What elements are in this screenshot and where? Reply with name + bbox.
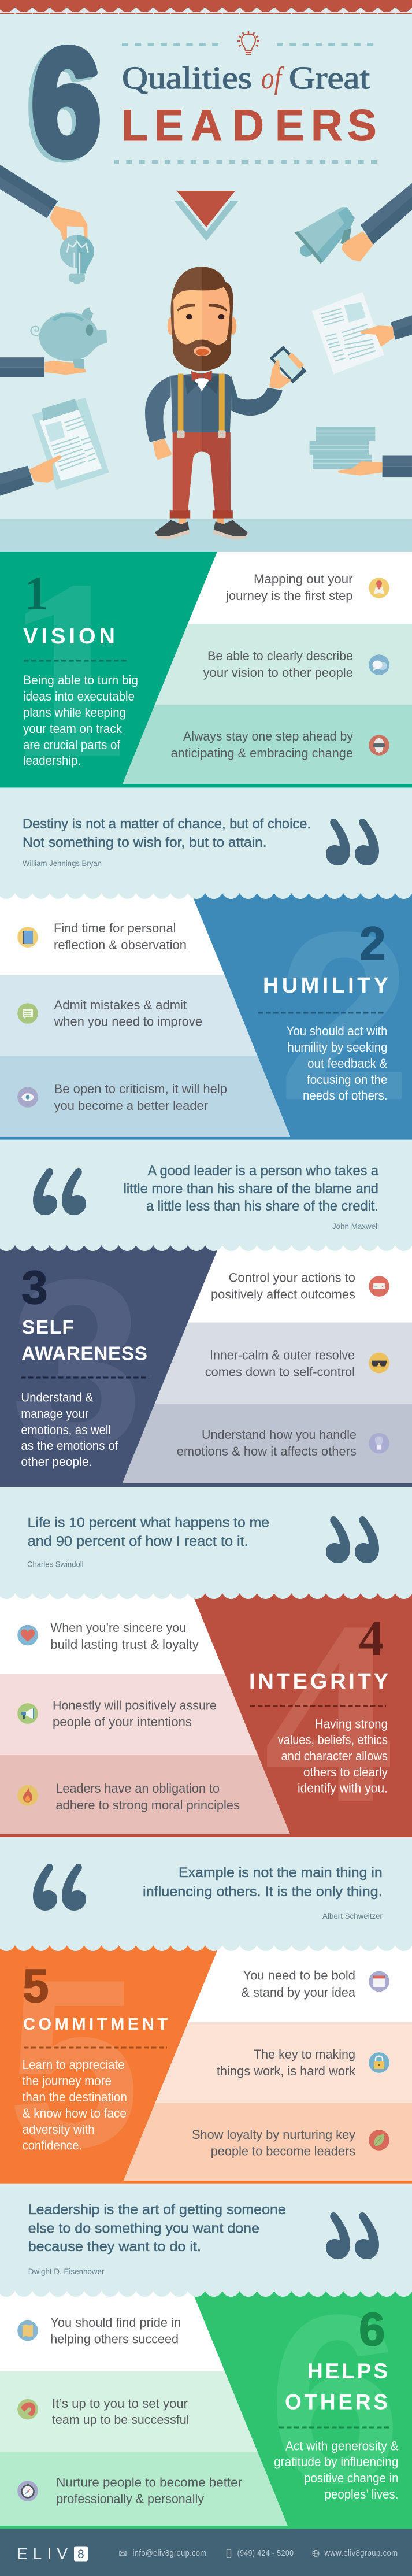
point text 1 (54, 921, 187, 952)
point text 2 (54, 998, 202, 1029)
description: and character allows (281, 1749, 388, 1763)
quote: leadership is the art: Leadership is the art of getting someone (28, 2202, 286, 2218)
description: ideas into executable (23, 689, 135, 704)
icon: closing quote mark (326, 819, 379, 865)
number 3: 3 (21, 1261, 48, 1314)
point text 2: people of your intentions (53, 1715, 192, 1729)
icon: light bulb (237, 31, 259, 54)
point text 2: when you need to improve (54, 1014, 202, 1029)
description: positive change in (304, 2471, 399, 2485)
quote: good leader: John Maxwell (332, 1222, 379, 1231)
big number 6 shadow: 6 (27, 21, 97, 190)
icon: megaphone (17, 1703, 38, 1724)
heading: humility: HUMILITY (263, 974, 388, 998)
description: the journey more (23, 2074, 112, 2088)
point text 2: things work, is hard work (217, 2064, 356, 2078)
point text 1: Control your actions to (229, 1271, 355, 1285)
point text 3 (56, 2475, 242, 2506)
number 4: 4 (359, 1610, 384, 1666)
shoes and ankles (179, 517, 186, 526)
scallop edge (0, 1593, 412, 1600)
point text 1 (50, 1620, 199, 1652)
point text 3: anticipating & embracing change (171, 746, 353, 760)
point text 2: team up to be successful (52, 2412, 189, 2427)
contact: email: info@eliv8group.com (133, 2549, 206, 2558)
point text 3: adhere to strong moral principles (55, 1798, 240, 1812)
point text 1: Mapping out your (254, 572, 353, 586)
scallop edge (0, 1945, 412, 1952)
quote: example (33, 1864, 383, 1920)
heading: Qualities of Great: Qualities (122, 60, 252, 95)
icon: stack with hand (310, 427, 412, 477)
heading: self awareness (21, 1317, 147, 1365)
point text 2 (203, 649, 353, 680)
point text 1: positively affect outcomes (211, 1287, 355, 1302)
icon: map pin (369, 578, 389, 598)
contact: phone: (949) 424 - 5200 (237, 2549, 294, 2558)
description: & know how to face (23, 2106, 127, 2120)
point text 3 (177, 1427, 357, 1459)
description: your team on track (23, 721, 123, 736)
quote: life is 10 percent: Life is 10 percent what happens to me (28, 1515, 269, 1531)
quote: good leader: a little less than his share of the credit. (146, 1198, 378, 1214)
description (274, 2439, 399, 2501)
heading: helps others (285, 2359, 388, 2414)
quote: destiny (23, 816, 379, 868)
number 6: 6 (359, 2303, 385, 2356)
header scallop band (0, 0, 412, 14)
icon: flame (17, 1785, 38, 1806)
icon: eye (17, 1087, 38, 1108)
heading: Qualities of Great: Great (289, 60, 370, 95)
description: Being able to turn big (23, 673, 138, 687)
hands and phone (153, 438, 172, 460)
description: gratitude by influencing (274, 2455, 399, 2469)
row: mapping (188, 552, 412, 624)
panel: vision (0, 527, 412, 812)
quote: leadership is the art: because they want to do it. (28, 2239, 201, 2255)
point text 1 (50, 2315, 181, 2346)
footer (0, 2529, 412, 2576)
downward triangle (174, 191, 239, 241)
quote: destiny: Destiny is not a matter of chance, but of choice. (23, 816, 311, 832)
point text 2: comes down to self-control (205, 1364, 355, 1379)
icon: map (17, 2320, 38, 2341)
icon: piggy bank with hand (0, 308, 107, 377)
description (23, 673, 138, 768)
heading: Qualities of Great (122, 60, 370, 95)
quote: leadership is the art (28, 2202, 379, 2276)
logo: ELIV (17, 2545, 68, 2563)
number 2: 2 (359, 917, 386, 970)
point text 1: You need to be bold (243, 1968, 355, 1982)
description: humility by seeking (288, 1040, 387, 1054)
description: Act with generosity & (285, 2439, 399, 2453)
contact: website: www.eliv8group.com (324, 2549, 398, 2558)
ghost number 3: 3 (10, 1229, 144, 1497)
heading: Qualities of Great: of (261, 61, 285, 95)
head (168, 317, 174, 335)
point text 3: Always stay one step ahead by (183, 729, 354, 743)
point text 1 (211, 1271, 355, 1302)
icon: magnet (17, 2399, 38, 2420)
panel: commitment (0, 1929, 412, 2197)
ghost number 6: 6 (268, 2264, 402, 2533)
heading: integrity: INTEGRITY (249, 1670, 388, 1694)
description: focusing on the (307, 1072, 387, 1087)
description (278, 1717, 388, 1796)
point text 2 (53, 1698, 217, 1729)
description: adversity with (23, 2122, 95, 2137)
point text 3: you become a better leader (54, 1098, 208, 1113)
description (21, 1390, 118, 1469)
description: are crucial parts of (23, 738, 121, 752)
description: emotions, as well (21, 1423, 111, 1437)
icon: closing quote mark (326, 2212, 379, 2259)
description (287, 1024, 388, 1103)
scallop edge (0, 893, 412, 900)
icon: leaf (369, 2130, 389, 2151)
description: Having strong (315, 1717, 388, 1731)
point text 2 (217, 2047, 356, 2078)
heading: helps others: HELPS (307, 2359, 388, 2383)
quote: example: influencing others. It is the only thing. (143, 1884, 383, 1900)
icon: closing quote mark (326, 1516, 379, 1563)
logo: 8 (77, 2548, 84, 2561)
point text 3: Be open to criticism, it will help (54, 1082, 227, 1096)
point text 2: Be able to clearly describe (207, 649, 353, 663)
point text 1: You should find pride in (50, 2315, 181, 2330)
quote: good leader: A good leader is a person who takes a (148, 1163, 379, 1179)
description: other people. (21, 1454, 92, 1469)
point text 2: Inner-calm & outer resolve (210, 1348, 355, 1362)
man character (145, 267, 307, 540)
point text 1 (225, 572, 353, 603)
jacket and arms (145, 376, 171, 442)
icon: newspaper with hand (312, 292, 412, 374)
description: peoples’ lives. (325, 2487, 399, 2501)
scallop edge (0, 2291, 412, 2297)
hero illustration (0, 165, 412, 552)
icon: opening quote mark (33, 1864, 86, 1911)
point text 3 (54, 1082, 227, 1113)
description: manage your (21, 1407, 88, 1421)
panel: helps others (0, 2264, 412, 2533)
heading: LEADERS: LEADERS (121, 101, 377, 150)
point text 2: Honestly will positively assure (53, 1698, 217, 1713)
quote: example: Albert Schweitzer (322, 1911, 383, 1920)
quote: life is 10 percent (27, 1515, 379, 1569)
icon: compass (17, 2481, 38, 2501)
icon: clipboard with hand (0, 398, 109, 496)
heading: commitment: COMMITMENT (23, 2015, 168, 2034)
point text 1: Find time for personal (54, 921, 176, 935)
panel: humility (0, 882, 412, 1150)
point text 3: professionally & personally (56, 2492, 205, 2506)
title block (27, 18, 377, 190)
heading: vision: VISION (23, 624, 115, 649)
icon: game controller (369, 1276, 389, 1297)
icon: sunglasses (369, 1353, 389, 1373)
description (23, 2057, 127, 2153)
point text 3: Show loyalty by nurturing key (192, 2127, 356, 2142)
quote: destiny: William Jennings Bryan (23, 858, 102, 868)
point text 2: your vision to other people (203, 665, 353, 680)
description: others to clearly (303, 1765, 388, 1779)
point text 3 (55, 1781, 240, 1812)
icon: padlock (369, 2052, 389, 2073)
point text 3: Leaders have an obligation to (55, 1781, 220, 1796)
heading: self awareness: AWARENESS (21, 1343, 147, 1365)
icon: robot helmet (369, 735, 389, 756)
icon: hand holding light bulb (0, 165, 94, 284)
icon: envelope (120, 2551, 126, 2556)
description: You should act with (287, 1024, 387, 1038)
ghost number 4: 4 (263, 1567, 395, 1858)
icon: opening quote mark (33, 1168, 86, 1215)
point text 2: Admit mistakes & admit (54, 998, 187, 1012)
icon: bulb (369, 1433, 389, 1453)
icon: book (17, 927, 38, 948)
point text 1: When you’re sincere you (50, 1620, 186, 1635)
point text 1 (242, 1968, 355, 2000)
point text 3 (171, 729, 354, 760)
description: Understand & (21, 1390, 94, 1405)
trousers (173, 432, 202, 511)
panel: integrity (0, 1567, 412, 1858)
icon: list bubble (17, 1003, 38, 1024)
panel: self awareness (0, 1229, 412, 1497)
description: confidence. (23, 2138, 82, 2153)
point text 1: & stand by your idea (242, 1985, 355, 2000)
ghost number 2: 2 (278, 882, 411, 1150)
description: identify with you. (298, 1781, 388, 1796)
quote: good leader (33, 1163, 379, 1231)
description: needs of others. (303, 1088, 387, 1103)
point text 1: helping others succeed (50, 2332, 179, 2346)
description: plans while keeping (23, 705, 126, 720)
icon: phone (227, 2549, 231, 2558)
point text 1: journey is the first step (225, 589, 352, 603)
point text 3 (192, 2127, 356, 2159)
ground (0, 519, 412, 552)
point text 2: It’s up to you to set your (52, 2396, 188, 2411)
description: out feedback & (307, 1056, 388, 1071)
icon: chat bubbles (369, 654, 389, 675)
heading: helps others: OTHERS (285, 2390, 388, 2414)
point text 3: people to become leaders (211, 2144, 355, 2159)
quote: leadership is the art: else to do something you want done (28, 2221, 259, 2237)
ghost number 5: 5 (7, 1929, 140, 2197)
description: than the destination (23, 2090, 127, 2104)
point text 3: emotions & how it affects others (177, 1444, 357, 1459)
description: Learn to appreciate (23, 2057, 124, 2072)
icon: heart (17, 1625, 38, 1645)
quote: life is 10 percent: and 90 percent of how I react to it. (28, 1534, 248, 1549)
big number 6: 6 (31, 18, 101, 187)
quote: leadership is the art: Dwight D. Eisenhower (28, 2267, 105, 2276)
icon: globe (313, 2551, 319, 2556)
quote: life is 10 percent: Charles Swindoll (27, 1560, 84, 1569)
number 5: 5 (23, 1960, 49, 2012)
point text 3: Nurture people to become better (56, 2475, 242, 2489)
point text 2 (52, 2396, 189, 2427)
quote: good leader: little more than his share of the blame and (124, 1181, 378, 1197)
number 1: 1 (24, 567, 49, 620)
quote: example: Example is not the main thing in (179, 1865, 383, 1881)
icon: calendar (369, 1971, 389, 1992)
point text 1: build lasting trust & loyalty (50, 1637, 199, 1652)
scallop edge (0, 1245, 412, 1252)
point text 1: reflection & observation (54, 938, 187, 952)
point text 2: The key to making (254, 2047, 355, 2061)
ghost number 1: 1 (5, 527, 133, 812)
description: values, beliefs, ethics (278, 1733, 388, 1747)
point text 2 (205, 1348, 355, 1379)
heading: self awareness: SELF (22, 1317, 74, 1338)
description: leadership. (23, 753, 81, 768)
point text 3: Understand how you handle (202, 1427, 357, 1442)
quote: destiny: Not something to wish for, but to attain. (23, 835, 267, 850)
description: as the emotions of (21, 1438, 118, 1453)
icon: hand holding megaphone (294, 183, 412, 264)
